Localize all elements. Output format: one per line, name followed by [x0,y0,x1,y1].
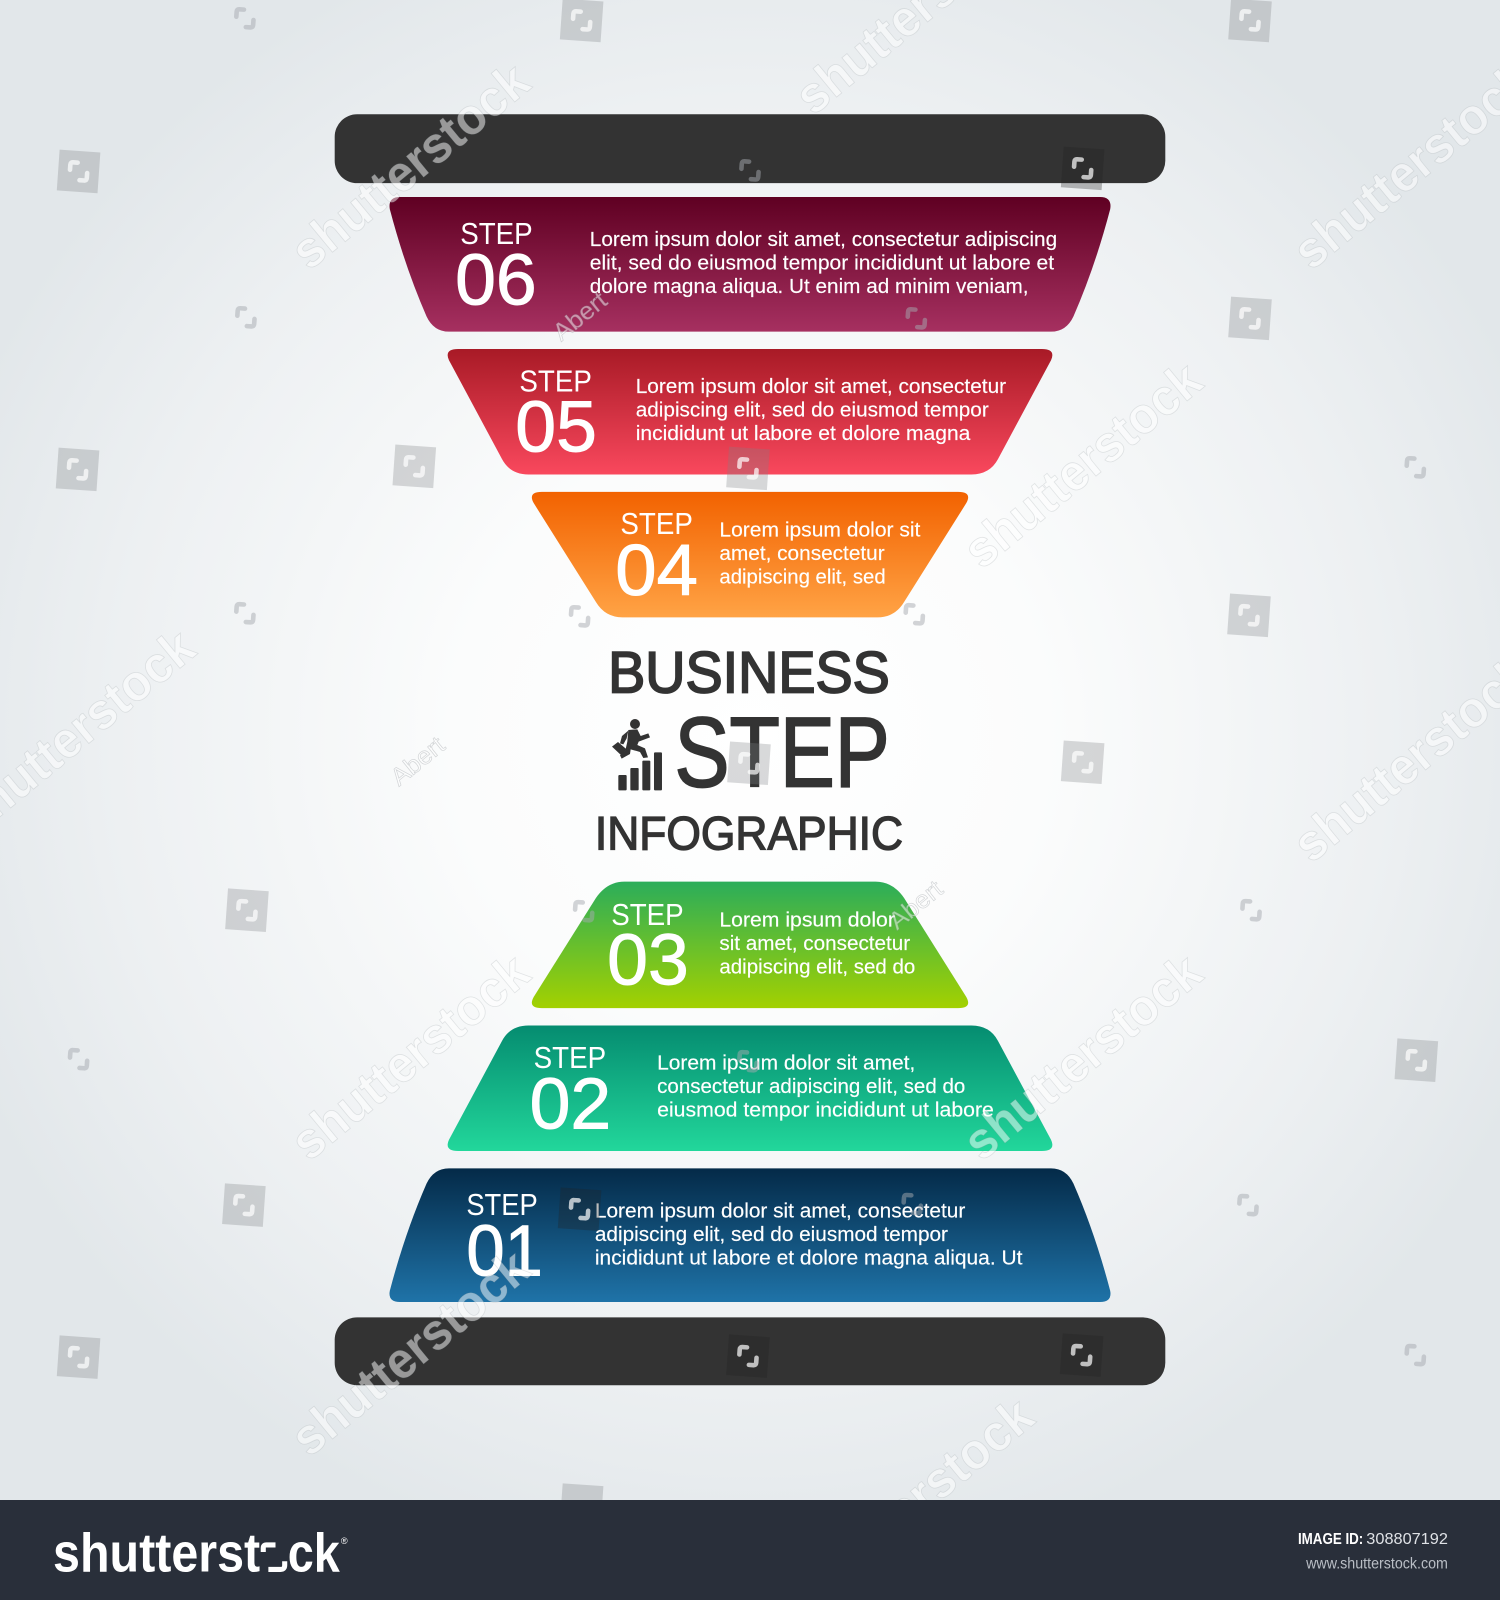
footer logo: ck [288,1521,340,1583]
panel: step 05: adipiscing elit, sed do eiusmod tempor [636,399,989,421]
panel: step 04 [532,492,968,617]
panel: step 02: consectetur adipiscing elit, sed do [657,1076,965,1098]
panel: step 04: amet, consectetur [719,543,885,565]
watermark overlay: shutterstock [952,350,1213,579]
image id: IMAGE ID: [1298,1531,1363,1548]
panel: step 05: 05 [515,387,597,468]
panel: step 03: adipiscing elit, sed do [719,956,915,978]
footer logo: shutterst [53,1521,260,1583]
panel: step 05 [448,349,1052,474]
watermark overlay: shutterstock [280,1238,540,1467]
panel: step 03: STEP [611,898,684,932]
panel: step 01: Lorem ipsum dolor sit amet, consectetur [595,1200,966,1222]
watermark overlay: Abert [884,876,948,935]
panel: step 06: elit, sed do eiusmod tempor incididunt ut labore et [590,252,1055,274]
panel: step 01: STEP [466,1188,538,1222]
title: BUSINESS STEP INFOGRAPHIC: INFOGRAPHIC [595,807,903,859]
title: BUSINESS STEP INFOGRAPHIC: BUSINESS [608,640,890,705]
panel: step 06: 06 [455,240,537,321]
panel: step 03: 03 [607,920,689,1001]
title: BUSINESS STEP INFOGRAPHIC: STEP [674,697,890,808]
panel: step 01 [390,1168,1110,1302]
website: www.shutterstock.com [1305,1555,1448,1572]
panel: step 06 [390,197,1110,332]
panel: step 04: 04 [615,530,698,611]
panel: step 06: STEP [460,217,533,251]
panel: step 03 [532,882,968,1008]
watermark overlay: shutterstock [952,942,1213,1171]
panel: step 01: adipiscing elit, sed do eiusmod tempor [595,1224,948,1246]
top dark bar [335,114,1165,183]
footer bar [0,1500,1500,1600]
watermark overlay: shutterstock [280,51,540,280]
panel: step 04: STEP [620,507,693,541]
panel: step 05: STEP [519,364,592,398]
panel: step 05: Lorem ipsum dolor sit amet, consectetur [636,376,1007,398]
panel: step 04: adipiscing elit, sed [719,567,886,589]
panel: step 02 [448,1026,1052,1151]
panel: step 02: 02 [530,1064,611,1145]
panel: step 06: Lorem ipsum dolor sit amet, consectetur adipiscing [590,229,1057,251]
panel: step 03: Lorem ipsum dolor [719,910,895,932]
panel: step 02: STEP [534,1041,606,1075]
panel: step 01: incididunt ut labore et dolore magna aliqua. Ut [595,1247,1023,1269]
footer bar: 308807192 [1366,1531,1448,1548]
watermark overlay: Abert [548,287,613,346]
footer logo: ® [341,1536,348,1546]
title: BUSINESS STEP INFOGRAPHIC [595,640,903,859]
panel: step 04: Lorem ipsum dolor sit [719,520,921,542]
panel: step 02: eiusmod tempor incididunt ut labore [657,1099,994,1121]
panel: step 05: incididunt ut labore et dolore magna [636,423,971,445]
watermark overlay: shutterstock [280,942,540,1171]
panel: step 03: sit amet, consectetur [719,933,911,955]
bottom dark bar [335,1317,1165,1385]
panel: step 02: Lorem ipsum dolor sit amet, [657,1052,915,1074]
panel: step 01: 01 [466,1211,543,1292]
watermark overlay: Abert [386,732,450,791]
icon: running businessman on rising bars [612,719,662,790]
panel: step 06: dolore magna aliqua. Ut enim ad minim veniam, [590,276,1029,298]
